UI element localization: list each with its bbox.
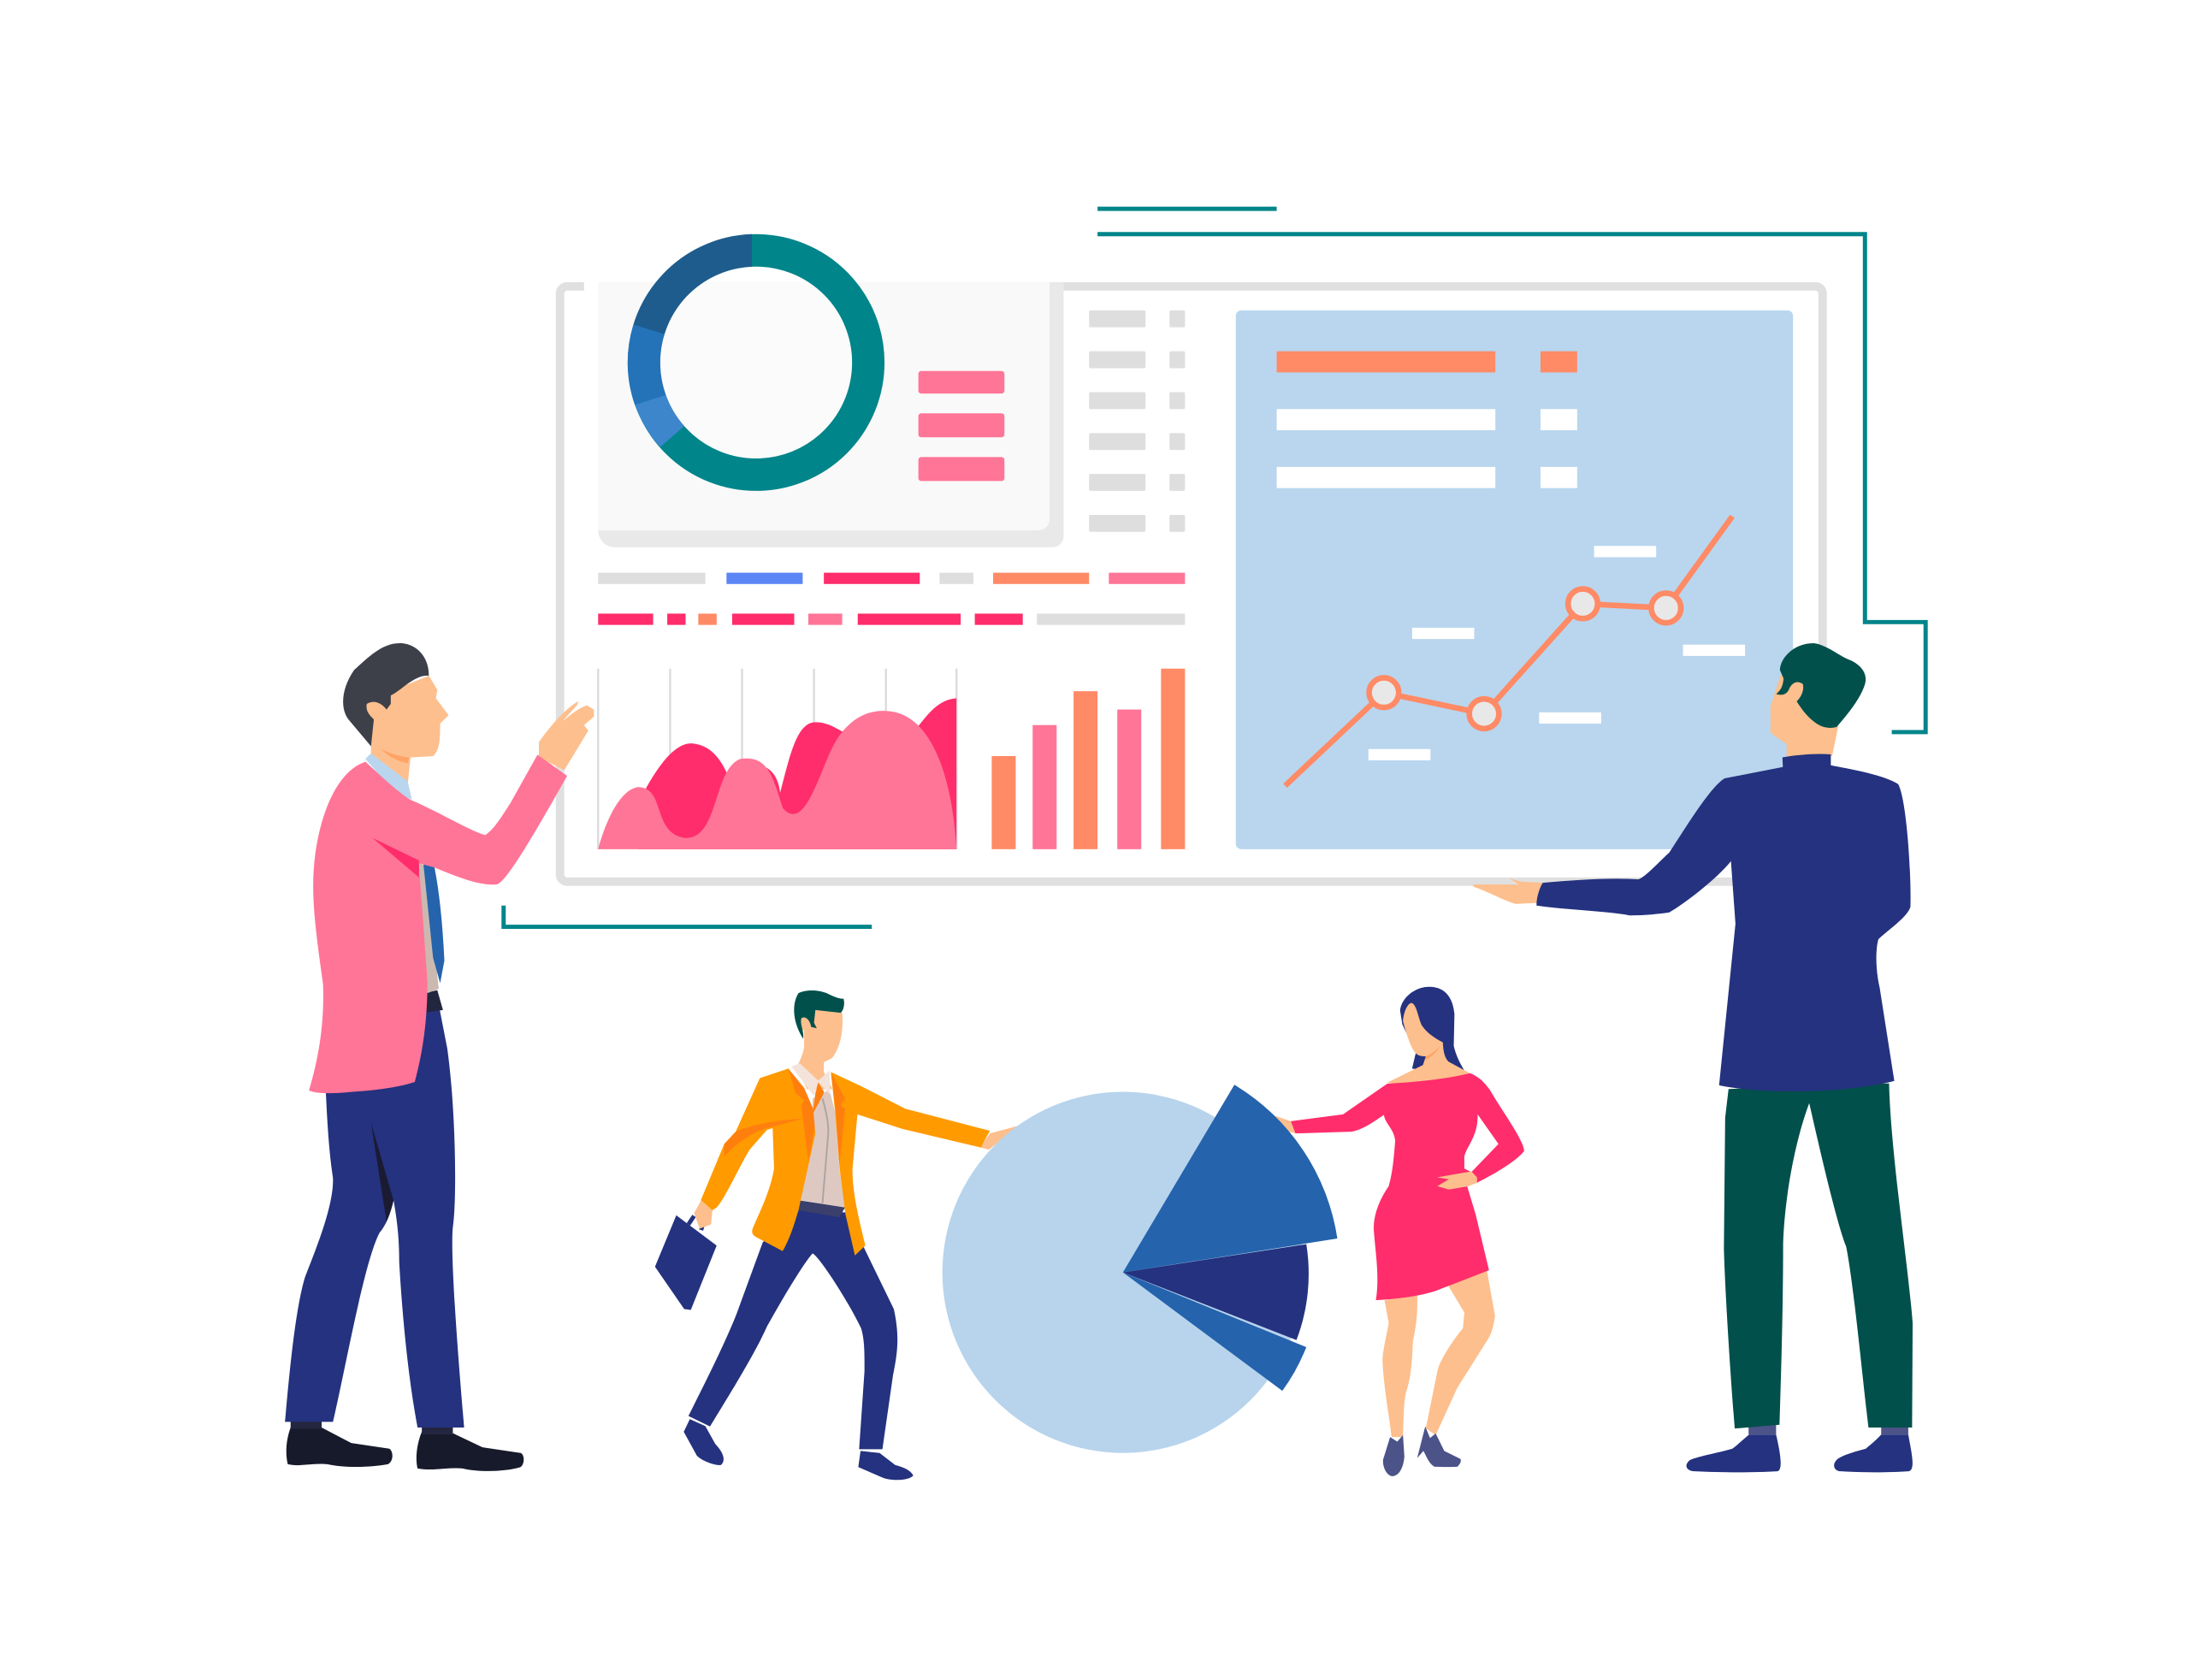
- hair: [343, 643, 429, 746]
- navy jacket: [1536, 754, 1911, 1091]
- data labels: [1369, 546, 1745, 760]
- legend bars row 2: [598, 613, 1185, 625]
- hand: [1473, 878, 1543, 904]
- panel header bars: [1277, 352, 1577, 488]
- collar: [365, 754, 412, 800]
- teal connector lines: [504, 209, 1925, 927]
- hands: [694, 1126, 1019, 1228]
- donut panel: [584, 276, 1064, 547]
- belt: [798, 1201, 845, 1217]
- trousers: [689, 1210, 897, 1449]
- shirt seam: [823, 1098, 828, 1203]
- shoes: [683, 1419, 914, 1480]
- legs: [1382, 1267, 1495, 1437]
- shoes: [1383, 1427, 1461, 1476]
- tie: [423, 862, 445, 984]
- dress: [1291, 1073, 1524, 1300]
- neck shadow: [1425, 1046, 1440, 1061]
- jacket left: [701, 1068, 815, 1251]
- area chart: [598, 669, 956, 849]
- line graph: [1285, 517, 1732, 786]
- person: woman in pink dress: [1275, 987, 1524, 1476]
- bar chart: [991, 669, 1185, 849]
- grey list: [1089, 310, 1185, 532]
- back hair: [1400, 987, 1464, 1072]
- neck shadow: [381, 749, 409, 763]
- briefcase: [655, 1215, 717, 1309]
- legend bars row 1: [598, 573, 1185, 584]
- collar: [791, 1063, 831, 1096]
- face and neck: [1387, 1003, 1470, 1089]
- socks: [1748, 1425, 1908, 1434]
- blue line chart panel: [1236, 310, 1793, 849]
- trouser crease: [371, 1123, 393, 1221]
- hand on pie: [1275, 1116, 1295, 1133]
- person: man in pink jacket: [285, 643, 594, 1471]
- lapel left: [789, 1068, 815, 1162]
- sleeve shadow: [725, 1119, 802, 1156]
- trousers: [285, 990, 464, 1428]
- jacket shadow: [372, 838, 419, 878]
- shoes: [287, 1416, 523, 1471]
- pie chart: [943, 1085, 1337, 1453]
- jacket right: [831, 1072, 990, 1256]
- head skin and neck: [364, 676, 448, 784]
- belt: [423, 990, 443, 1013]
- pink jacket: [309, 754, 567, 1093]
- shirt: [419, 862, 439, 993]
- hand on hip: [1437, 1172, 1477, 1190]
- hair: [794, 990, 844, 1039]
- donut chart: [628, 234, 868, 475]
- lapel right: [831, 1073, 845, 1165]
- trousers: [1724, 1084, 1913, 1428]
- skin neck and face: [797, 1010, 843, 1089]
- tie: [813, 1083, 824, 1114]
- donut legend: [919, 371, 1004, 481]
- hair: [1776, 643, 1866, 728]
- person: man in orange jacket: [655, 990, 1019, 1480]
- shirt: [800, 1090, 845, 1208]
- neck and head skin: [1771, 676, 1838, 759]
- shoes: [1687, 1434, 1913, 1472]
- dashboard screen frame: [560, 287, 1823, 882]
- person: man in navy jacket: [1473, 643, 1913, 1472]
- hand: [539, 701, 594, 770]
